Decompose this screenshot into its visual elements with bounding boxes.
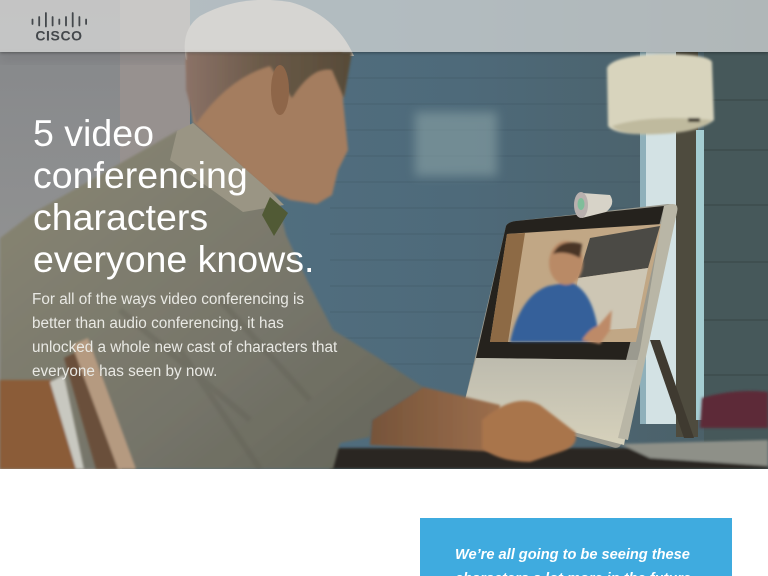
neck and face xyxy=(186,52,348,204)
lamp xyxy=(607,54,714,134)
hand xyxy=(482,401,576,462)
collar xyxy=(170,123,284,212)
ear xyxy=(271,65,289,115)
head top behind header xyxy=(185,0,354,60)
title: 5 video xyxy=(33,112,154,154)
intro text: For all of the ways video conferencing is xyxy=(32,291,304,308)
video device xyxy=(464,192,694,448)
shirt xyxy=(0,131,423,469)
intro text xyxy=(32,291,338,380)
title: characters xyxy=(33,196,208,238)
chair and seat xyxy=(0,338,136,469)
chair at right xyxy=(700,391,768,428)
table xyxy=(330,440,768,469)
base panel xyxy=(464,358,640,445)
intro text: unlocked a whole new cast of characters that xyxy=(32,339,337,356)
intro text: everyone has seen by now. xyxy=(32,363,217,380)
title xyxy=(33,112,314,280)
forearm xyxy=(370,387,500,452)
header bar xyxy=(0,0,768,52)
callout xyxy=(420,518,732,576)
title: everyone knows. xyxy=(33,238,314,280)
title: conferencing xyxy=(33,154,248,196)
hair xyxy=(186,52,352,124)
logo: Cisco xyxy=(32,12,87,43)
remote participant xyxy=(510,241,612,344)
screen image xyxy=(490,224,662,344)
camera xyxy=(574,192,612,218)
intro text: better than audio conferencing, it has xyxy=(32,315,284,332)
device stand xyxy=(650,340,694,438)
device body xyxy=(464,204,677,448)
man xyxy=(0,0,576,469)
callout: We’re all going to be seeing these xyxy=(455,547,690,563)
shirt folds xyxy=(120,300,310,469)
